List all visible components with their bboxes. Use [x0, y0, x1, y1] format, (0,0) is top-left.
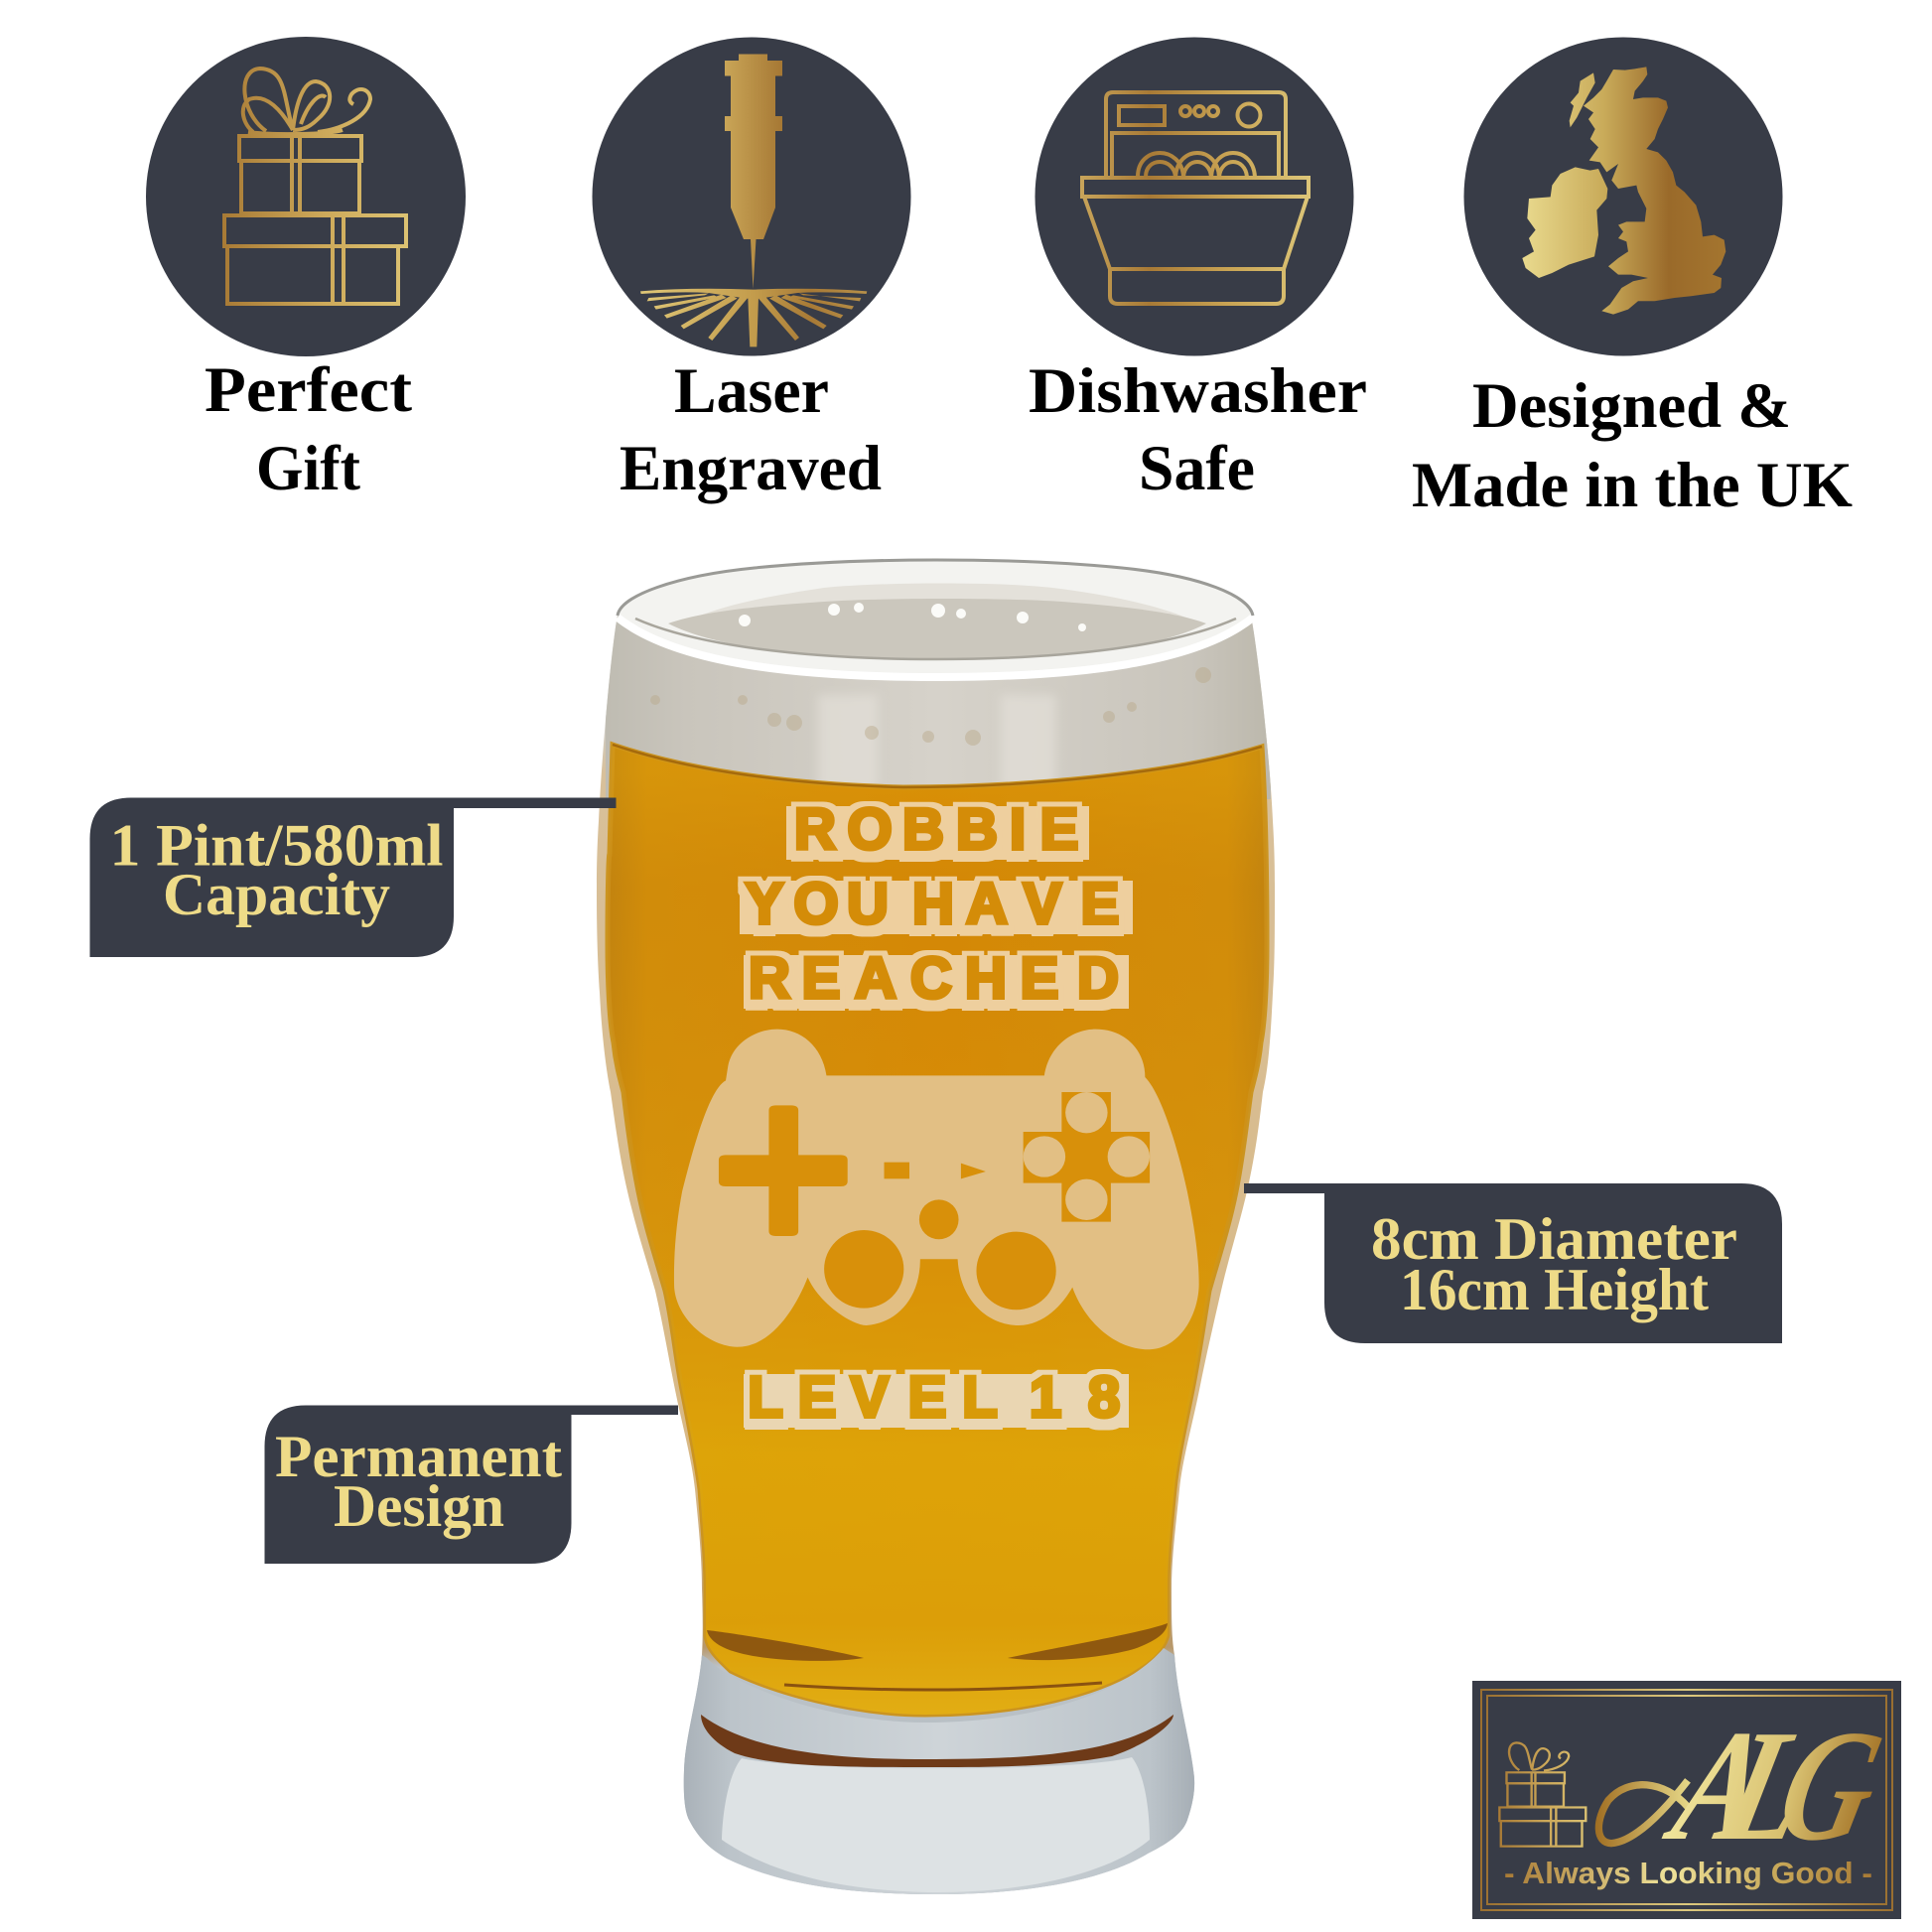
icon: dishwasher in circle [1035, 38, 1354, 355]
icon: gift boxes in circle [146, 37, 466, 356]
glass body [597, 616, 1275, 1894]
feature: dishwasher safe [1029, 38, 1367, 504]
callout: dimensions: 16cm Height [1400, 1257, 1709, 1322]
beer liquid [608, 745, 1267, 1715]
callout: dimensions [1244, 1183, 1782, 1343]
glass base [684, 1648, 1194, 1894]
label: designed and made in the UK: Designed & [1472, 370, 1791, 442]
icon: laser head in circle [592, 38, 911, 355]
callout: dimensions: 8cm Diameter [1371, 1206, 1737, 1272]
label: designed and made in the UK: Made in the UK [1412, 450, 1853, 521]
label: perfect gift [205, 354, 412, 504]
feature: designed and made in the UK [1412, 38, 1853, 521]
logo tagline: - Always Looking Good - [1504, 1856, 1872, 1890]
callout: permanent design: Permanent [275, 1424, 562, 1489]
pint glass of beer [597, 560, 1275, 1894]
callout: capacity [89, 798, 616, 957]
feature: laser engraved [592, 38, 911, 504]
label: laser engraved: Engraved [620, 433, 882, 504]
engraved text: reached: REACHED [749, 946, 1119, 1011]
feature: perfect gift [146, 37, 466, 504]
label: perfect gift: Perfect [205, 354, 412, 426]
label: laser engraved: Laser [674, 355, 829, 427]
logo A swash [1598, 1780, 1688, 1844]
logo gift icon [1499, 1742, 1586, 1847]
label: dishwasher safe [1029, 355, 1367, 504]
glass rim and top of foam [618, 560, 1253, 677]
callout: capacity: Capacity [163, 862, 390, 927]
callout: permanent design [264, 1406, 678, 1564]
engraved icon: game controller [674, 1030, 1199, 1349]
logo monogram: ALG [1652, 1698, 1897, 1873]
callout: permanent design: Design [334, 1473, 504, 1539]
label: dishwasher safe: Safe [1139, 433, 1255, 504]
icon: UK and Ireland map in circle [1463, 38, 1783, 355]
label: dishwasher safe: Dishwasher [1029, 355, 1367, 427]
label: perfect gift: Gift [256, 433, 360, 504]
callout: capacity: 1 Pint/580ml [109, 812, 443, 878]
label: designed and made in the UK [1412, 370, 1853, 521]
foam head [606, 616, 1271, 799]
logo: Always Looking Good [1472, 1681, 1901, 1919]
engraved text: level: LEVEL 18 [748, 1365, 1120, 1430]
engraved text: you have: YOU HAVE [746, 872, 1119, 936]
engraved text: name: ROBBIE [794, 797, 1078, 862]
label: laser engraved [620, 355, 882, 504]
